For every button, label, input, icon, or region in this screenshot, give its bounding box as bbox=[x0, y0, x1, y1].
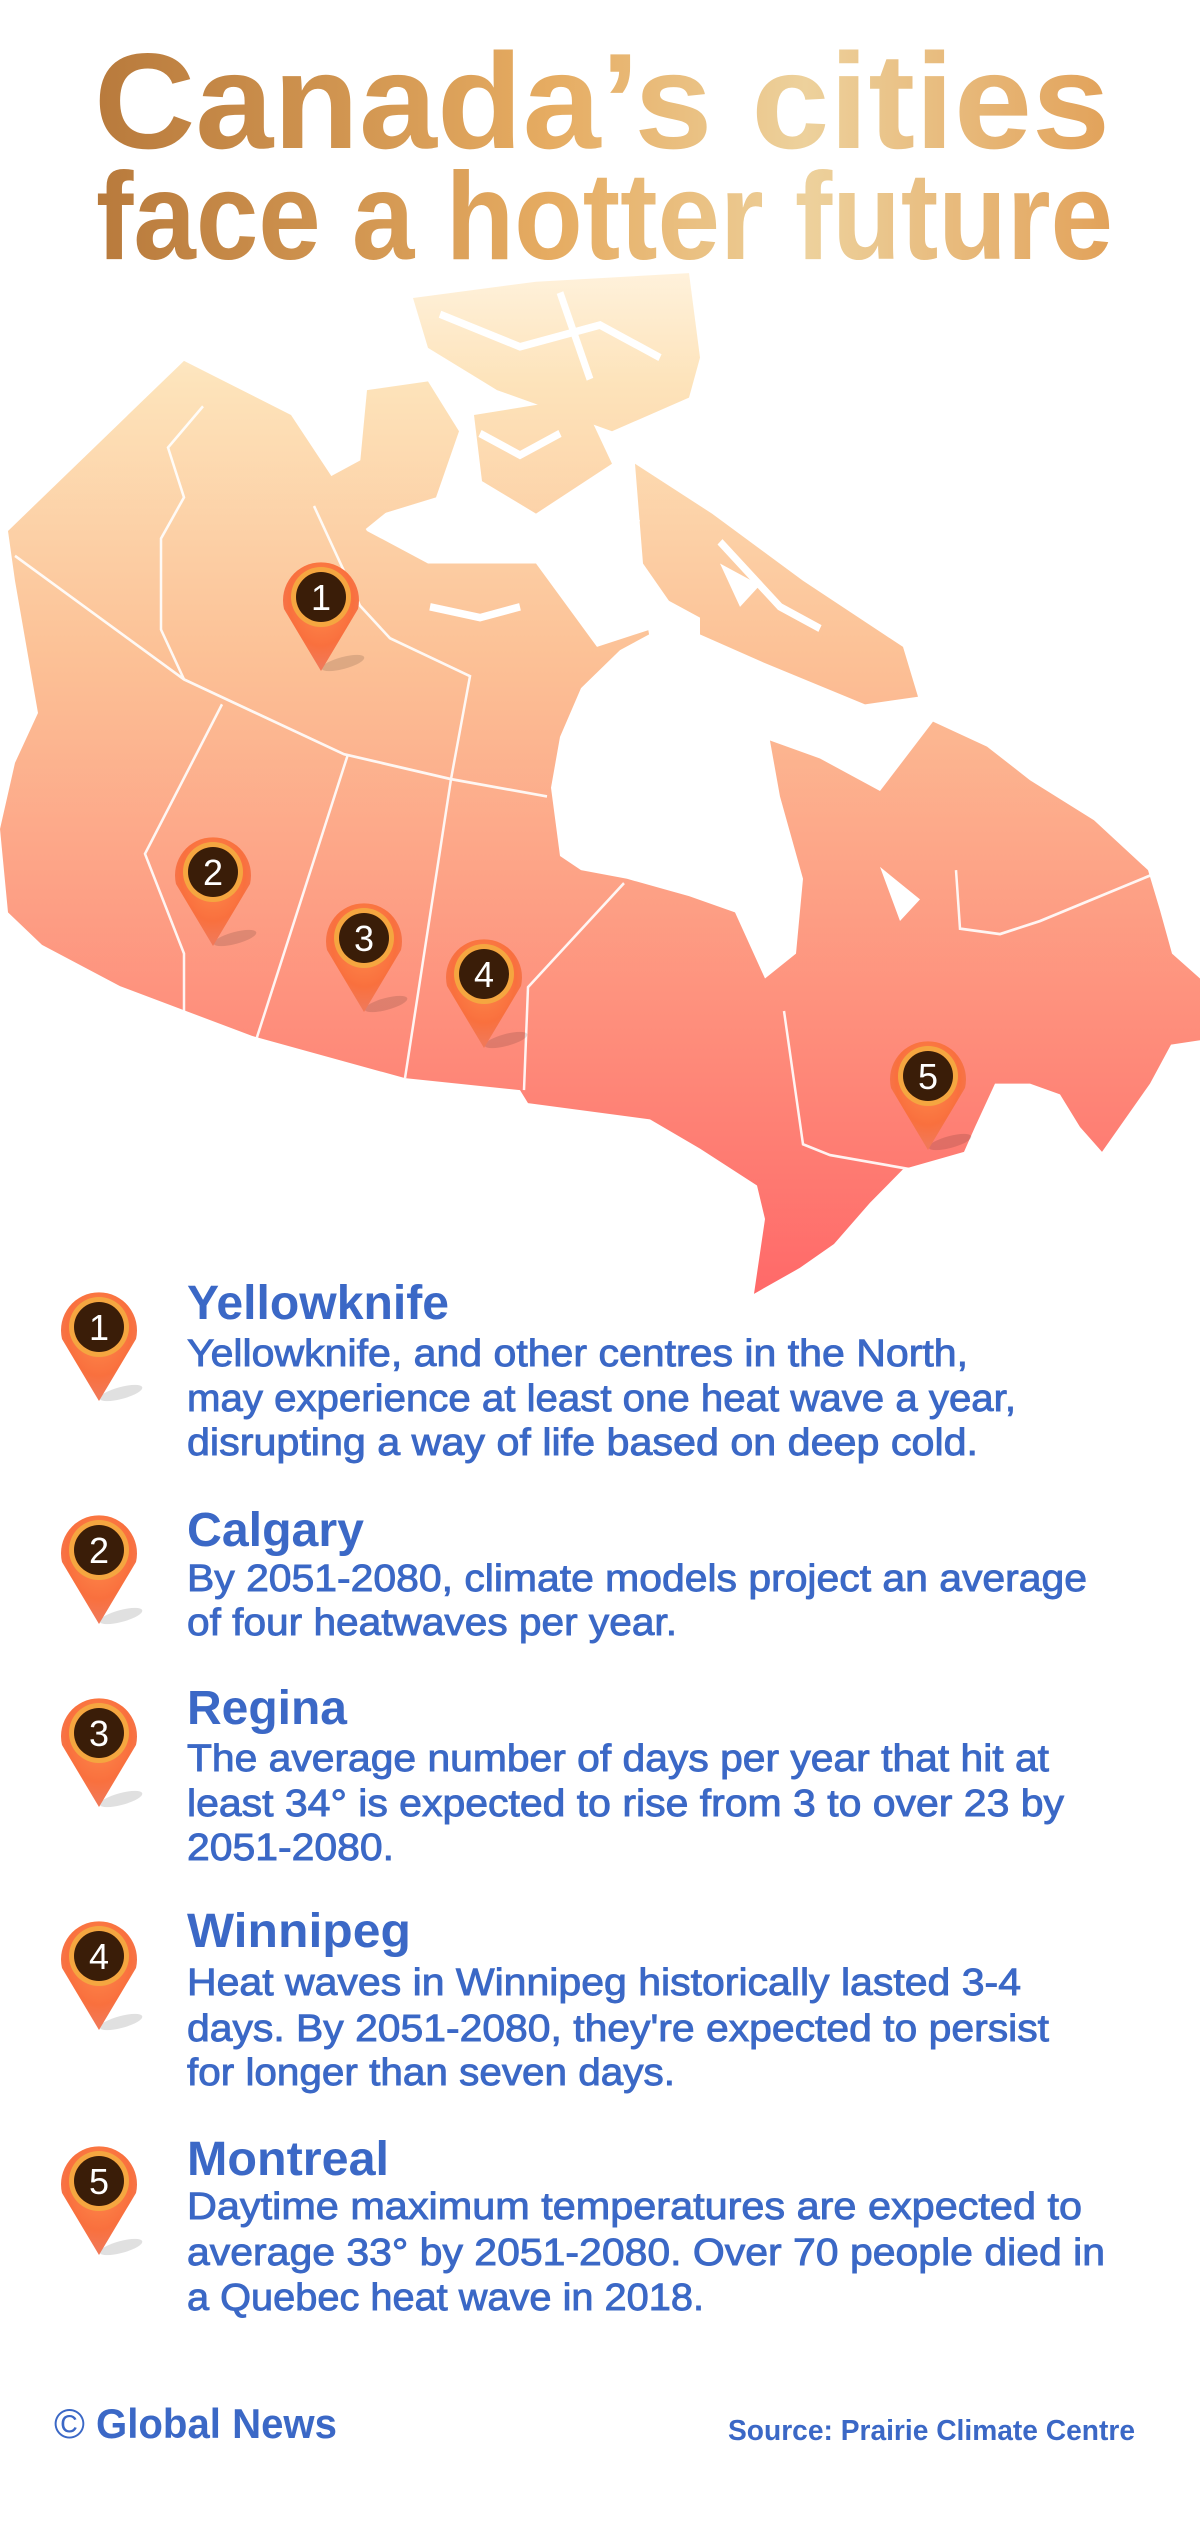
text: Calgary: Calgary bbox=[187, 1504, 364, 1557]
text: Yellowknife: Yellowknife bbox=[187, 1277, 449, 1330]
footer: source: Source: Prairie Climate Centre bbox=[728, 2415, 1135, 2447]
icon: pin 1: 1 bbox=[89, 1307, 109, 1348]
text: Regina: 2051-2080. bbox=[187, 1827, 394, 1869]
icon: pin 3 bbox=[61, 1698, 144, 1810]
text: Regina: least 34° is expected to rise from 3 to over 23 by bbox=[187, 1783, 1064, 1825]
map pin 2: Calgary bbox=[175, 837, 258, 949]
title: face a hotter future bbox=[96, 148, 1113, 286]
text: Winnipeg: for longer than seven days. bbox=[187, 2052, 675, 2094]
icon: pin 5: 5 bbox=[89, 2161, 109, 2202]
text: Winnipeg: Winnipeg bbox=[187, 1905, 411, 1958]
text: Yellowknife: Yellowknife, and other centres in the North, bbox=[187, 1333, 968, 1375]
text: Yellowknife bbox=[187, 1277, 1016, 1464]
map pin 4: Winnipeg: 4 bbox=[474, 954, 494, 995]
text: Regina: The average number of days per year that hit at bbox=[187, 1738, 1049, 1780]
item 4: Winnipeg bbox=[61, 1905, 1049, 2094]
text: Calgary: of four heatwaves per year. bbox=[187, 1602, 677, 1644]
map pin 5: Montreal: 5 bbox=[918, 1056, 938, 1097]
text: Calgary bbox=[187, 1504, 1087, 1644]
text: Regina bbox=[187, 1682, 1064, 1869]
map pin 1: Yellowknife: 1 bbox=[311, 577, 331, 618]
item 5: Montreal bbox=[61, 2133, 1105, 2319]
title bbox=[94, 25, 1113, 286]
item 1: Yellowknife bbox=[61, 1277, 1016, 1464]
text: Yellowknife: disrupting a way of life based on deep cold. bbox=[187, 1422, 978, 1464]
text: Montreal: a Quebec heat wave in 2018. bbox=[187, 2277, 704, 2319]
text: Montreal: average 33° by 2051-2080. Over 70 people died in bbox=[187, 2232, 1105, 2274]
province borders bbox=[15, 406, 1150, 1169]
icon: pin 2: 2 bbox=[89, 1530, 109, 1571]
map pin 4: Winnipeg bbox=[446, 939, 529, 1051]
map pin 3: Regina bbox=[326, 903, 409, 1015]
footer: Global News credit: Global News bbox=[96, 2400, 337, 2447]
text: Montreal: Montreal bbox=[187, 2133, 389, 2186]
text: Winnipeg: days. By 2051-2080, they're expected to persist bbox=[187, 2008, 1049, 2050]
map of Canada bbox=[0, 273, 1200, 1294]
item 2: Calgary bbox=[61, 1504, 1087, 1644]
text: Montreal: Daytime maximum temperatures are expected to bbox=[187, 2186, 1082, 2228]
text: Calgary: By 2051-2080, climate models project an average bbox=[187, 1558, 1087, 1600]
footer: Global News credit: © bbox=[54, 2400, 85, 2447]
Hudson Bay bbox=[551, 630, 803, 978]
item 3: Regina bbox=[61, 1682, 1064, 1869]
icon: pin 2 bbox=[61, 1515, 144, 1627]
map pin 3: Regina: 3 bbox=[354, 918, 374, 959]
icon: pin 5 bbox=[61, 2146, 144, 2258]
text: Winnipeg: Heat waves in Winnipeg historically lasted 3-4 bbox=[187, 1962, 1021, 2004]
text: Winnipeg bbox=[187, 1905, 1049, 2094]
text: Yellowknife: may experience at least one heat wave a year, bbox=[187, 1378, 1016, 1420]
text: Regina: Regina bbox=[187, 1682, 347, 1735]
map pin 5: Montreal bbox=[890, 1041, 973, 1153]
icon: pin 3: 3 bbox=[89, 1713, 109, 1754]
icon: pin 4 bbox=[61, 1921, 144, 2033]
icon: pin 1 bbox=[61, 1292, 144, 1404]
icon: pin 4: 4 bbox=[89, 1936, 109, 1977]
map pin 1: Yellowknife bbox=[283, 562, 366, 674]
title: Canada’s cities bbox=[94, 25, 1110, 177]
text: Montreal bbox=[187, 2133, 1105, 2319]
map pin 2: Calgary: 2 bbox=[203, 852, 223, 893]
